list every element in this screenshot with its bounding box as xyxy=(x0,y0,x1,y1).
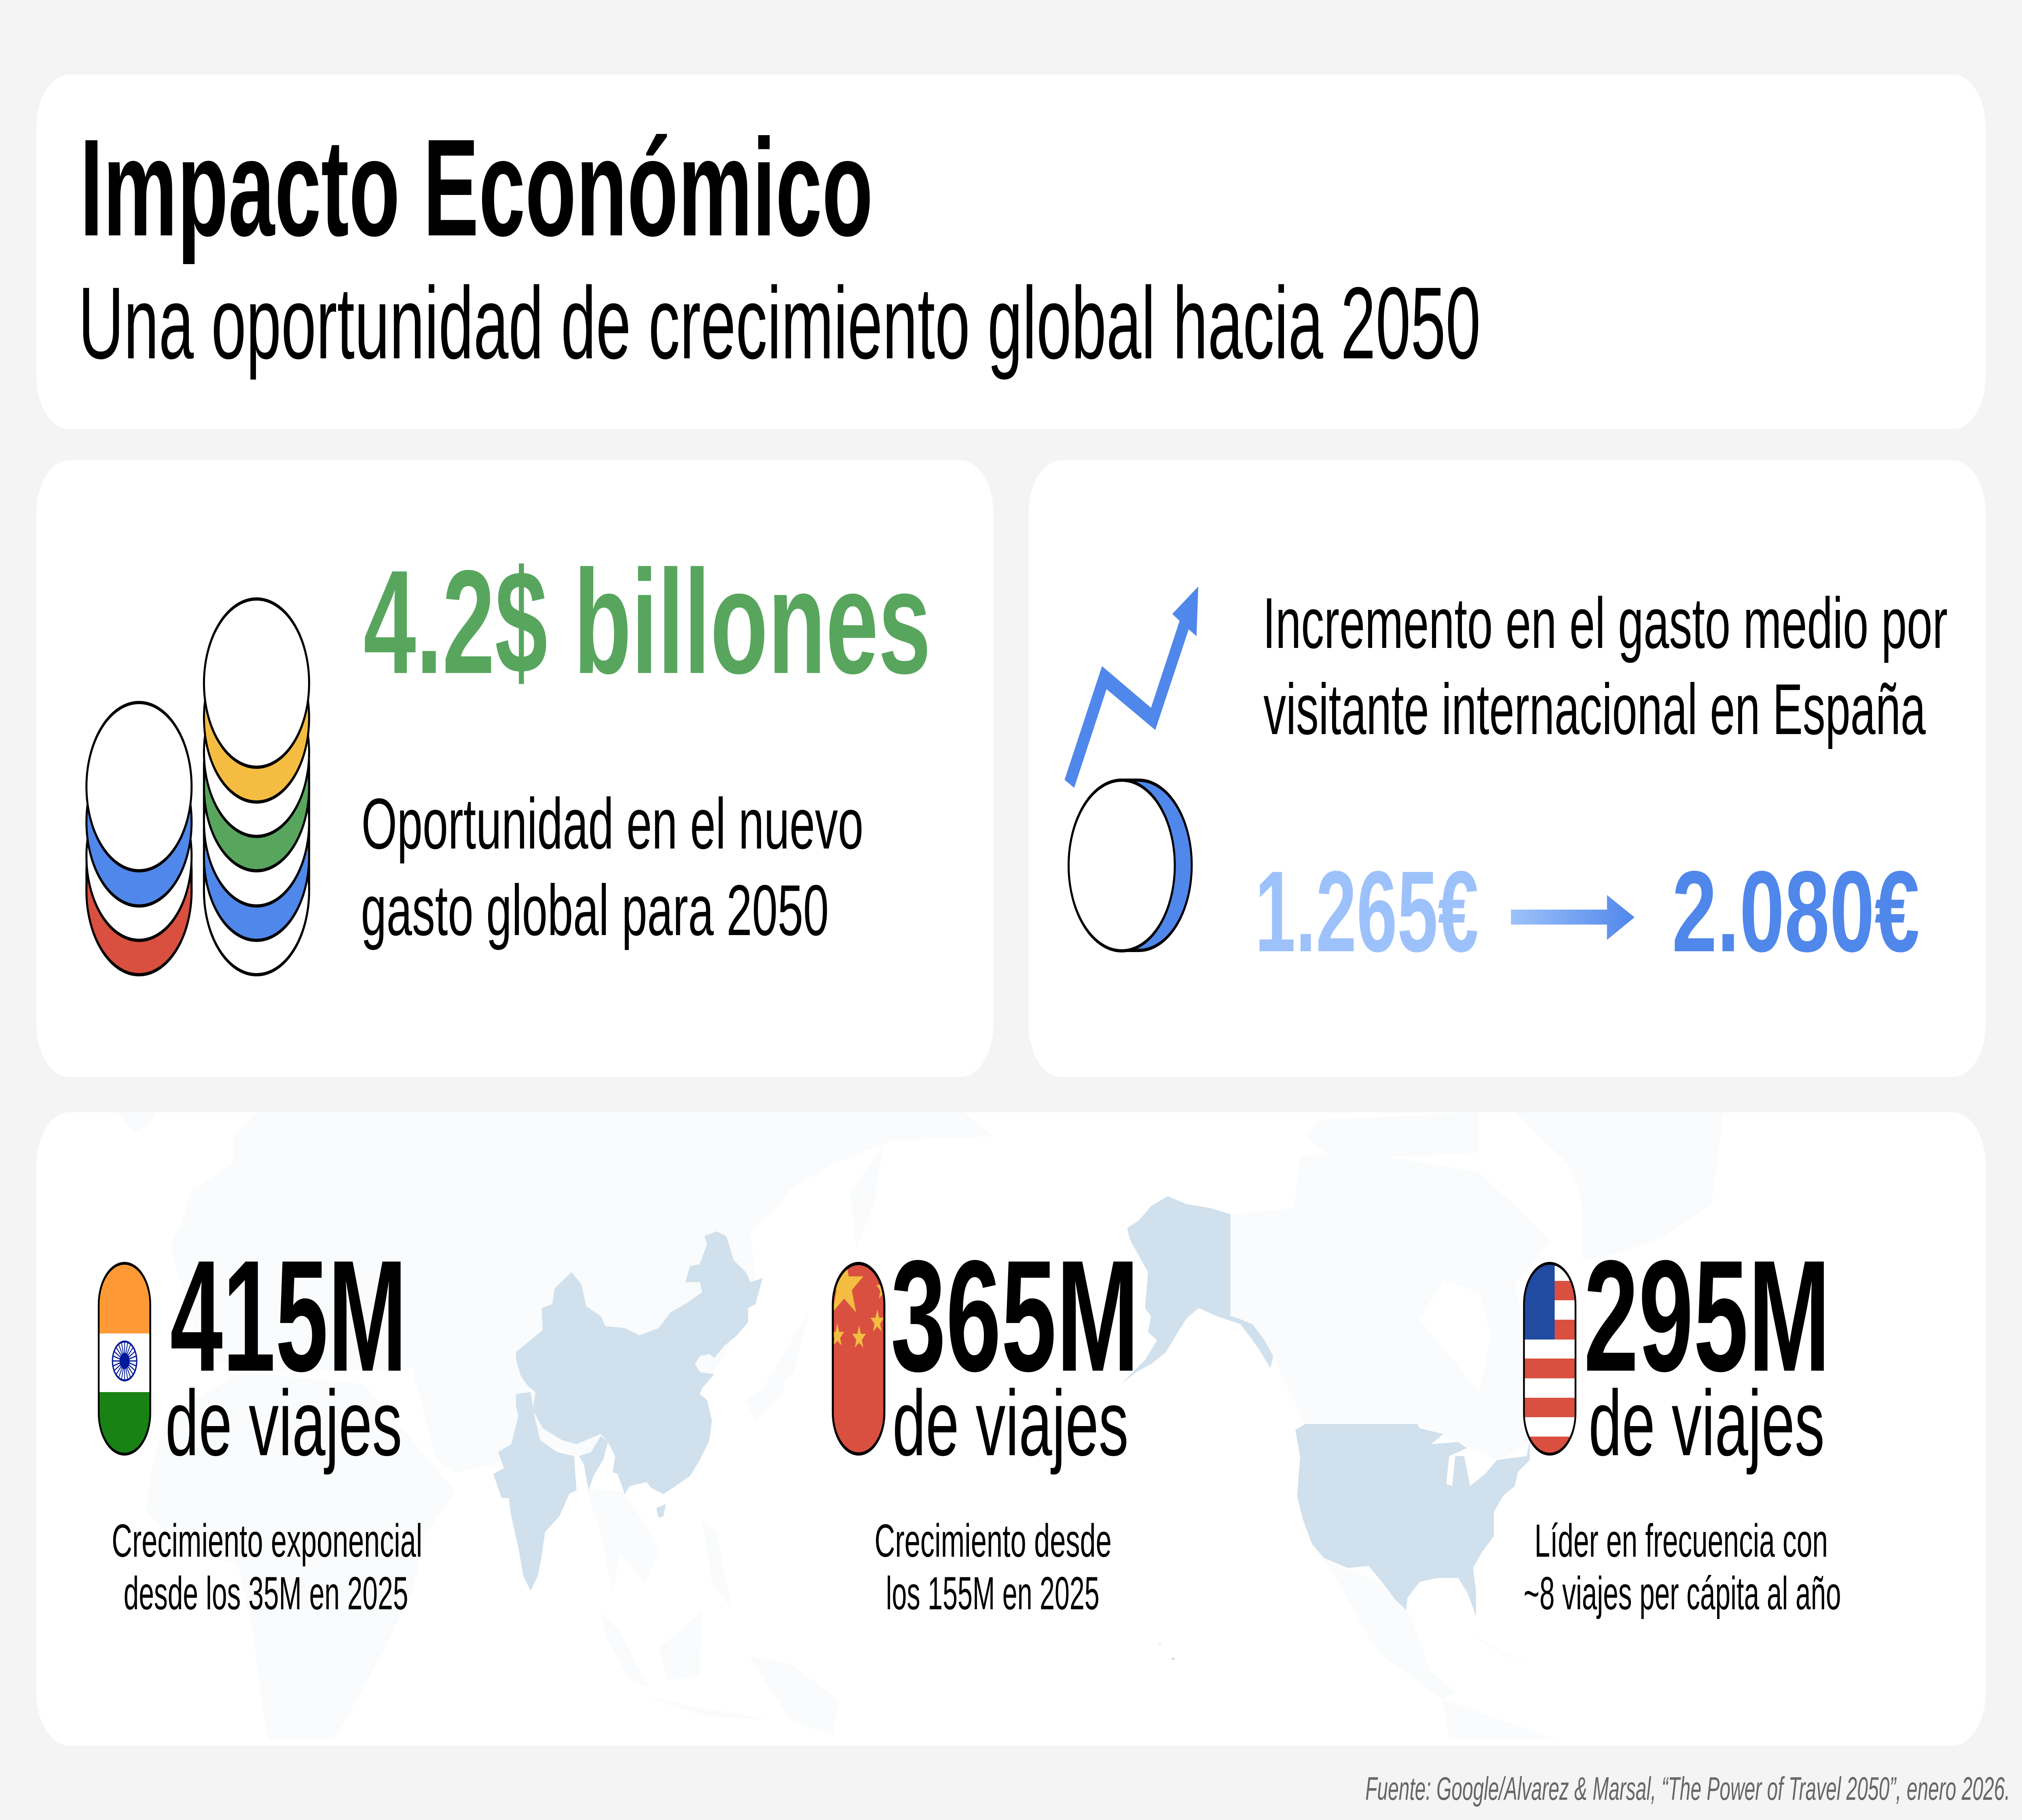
number: 295M xyxy=(1584,1227,1830,1405)
icon: rising arrow xyxy=(1064,586,1198,788)
subtitle: Una oportunidad de crecimiento global hacia 2050 xyxy=(78,266,1481,380)
description: desde los 35M en 2025 xyxy=(124,1568,408,1619)
stat: United States xyxy=(1523,1227,1841,1619)
description: visitante internacional en España xyxy=(1263,669,1926,749)
unit: de viajes xyxy=(165,1371,402,1475)
description: Crecimiento exponencial xyxy=(112,1515,422,1567)
number: 365M xyxy=(890,1227,1139,1405)
value: 2.080€: 2.080€ xyxy=(1672,847,1920,976)
description xyxy=(875,1515,1112,1619)
world map background xyxy=(99,1196,1823,1660)
description xyxy=(361,784,863,950)
description: los 155M en 2025 xyxy=(886,1568,1100,1619)
description: Incremento en el gasto medio por xyxy=(1263,583,1948,663)
description xyxy=(112,1515,422,1619)
panel: spending per visitor xyxy=(1029,460,1986,1077)
flag: India xyxy=(98,1262,151,1456)
flag: United States xyxy=(1523,1262,1576,1456)
description: gasto global para 2050 xyxy=(361,870,829,950)
description: Oportunidad en el nuevo xyxy=(362,784,863,864)
panel: title xyxy=(36,74,1986,429)
unit: de viajes xyxy=(1588,1371,1825,1475)
panel: global spending opportunity xyxy=(36,460,993,1077)
unit: de viajes xyxy=(893,1371,1129,1475)
panel: travellers by country xyxy=(36,1112,1986,1746)
description xyxy=(1263,583,1948,749)
stat: India xyxy=(98,1261,421,1610)
description xyxy=(1524,1515,1841,1619)
description: Crecimiento desde xyxy=(875,1515,1112,1567)
arrow xyxy=(1511,895,1635,940)
flag: China xyxy=(831,1262,886,1456)
value: 1.265€: 1.265€ xyxy=(1255,847,1478,976)
description: Líder en frecuencia con xyxy=(1534,1515,1828,1567)
big number: 4.2$ billones: 4.2$ billones xyxy=(364,540,931,705)
icon: coin xyxy=(1068,780,1192,951)
description: ~8 viajes per cápita al año xyxy=(1524,1568,1841,1619)
icon: coin stacks xyxy=(87,599,309,975)
title: Impacto Económico xyxy=(80,111,873,266)
number: 415M xyxy=(170,1227,407,1405)
stat: China xyxy=(831,1260,1132,1610)
